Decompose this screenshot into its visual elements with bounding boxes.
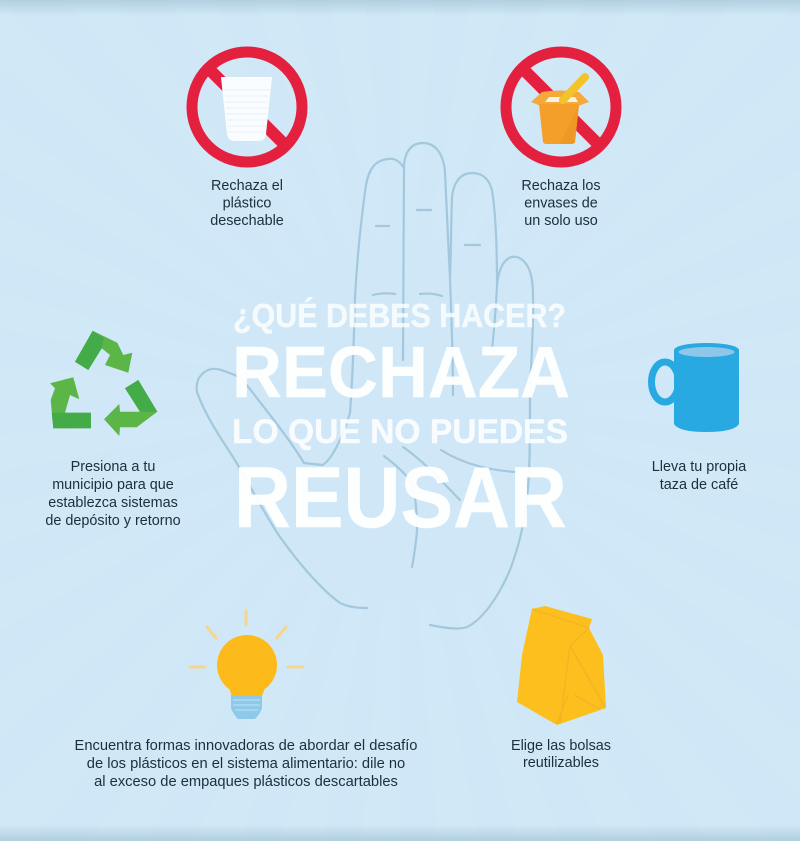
caption: recycling	[45, 459, 181, 529]
plastic cup	[221, 77, 272, 141]
caption: bag: reutilizables	[523, 755, 599, 771]
bottom edge shading	[0, 825, 800, 841]
title: ¿QUÉ DEBES HACER?	[233, 297, 566, 334]
icon: light bulb	[190, 611, 303, 719]
caption: container	[521, 178, 601, 229]
top edge shading	[0, 0, 800, 16]
caption: bulb	[75, 738, 417, 790]
caption: container: Rechaza los	[521, 178, 601, 194]
caption: mug: taza de café	[660, 477, 738, 493]
prohibition bar	[522, 68, 600, 146]
caption: bulb: Encuentra formas innovadoras de abordar el desafío	[75, 738, 417, 754]
title: LO QUE NO PUEDES	[232, 413, 568, 451]
caption: mug: Lleva tu propia	[652, 459, 746, 475]
prohibition ring	[506, 52, 616, 162]
caption: recycling: municipio para que	[52, 477, 174, 493]
title: REUSAR	[234, 450, 567, 546]
caption: bag	[511, 738, 611, 771]
caption: bag: Elige las bolsas	[511, 738, 611, 754]
caption: plastic cup	[210, 178, 284, 229]
caption: container: un solo uso	[524, 213, 598, 229]
caption: recycling: establezca sistemas	[48, 495, 178, 511]
icon: recycling arrows	[50, 331, 157, 436]
icon: coffee mug	[652, 343, 739, 432]
caption: plastic cup: Rechaza el	[211, 178, 283, 194]
icon: no single-use container	[506, 52, 616, 162]
title	[232, 297, 570, 546]
caption: mug	[652, 459, 746, 493]
hand outline	[197, 143, 533, 628]
caption: recycling: de depósito y retorno	[45, 513, 181, 529]
caption: recycling: Presiona a tu	[71, 459, 155, 475]
caption: plastic cup: desechable	[210, 213, 284, 229]
icon: no plastic cup	[192, 52, 302, 162]
caption: plastic cup: plástico	[223, 196, 271, 212]
prohibition ring	[192, 52, 302, 162]
title: RECHAZA	[232, 333, 570, 413]
yogurt cup	[531, 77, 589, 144]
bulb rays	[190, 611, 303, 667]
prohibition bar behind cup	[208, 68, 286, 146]
caption: container: envases de	[524, 196, 598, 212]
caption: bulb: al exceso de empaques plásticos descartables	[94, 774, 398, 790]
icon: reusable paper bag	[517, 606, 606, 725]
caption: bulb: de los plásticos en el sistema alimentario: dile no	[87, 756, 405, 772]
